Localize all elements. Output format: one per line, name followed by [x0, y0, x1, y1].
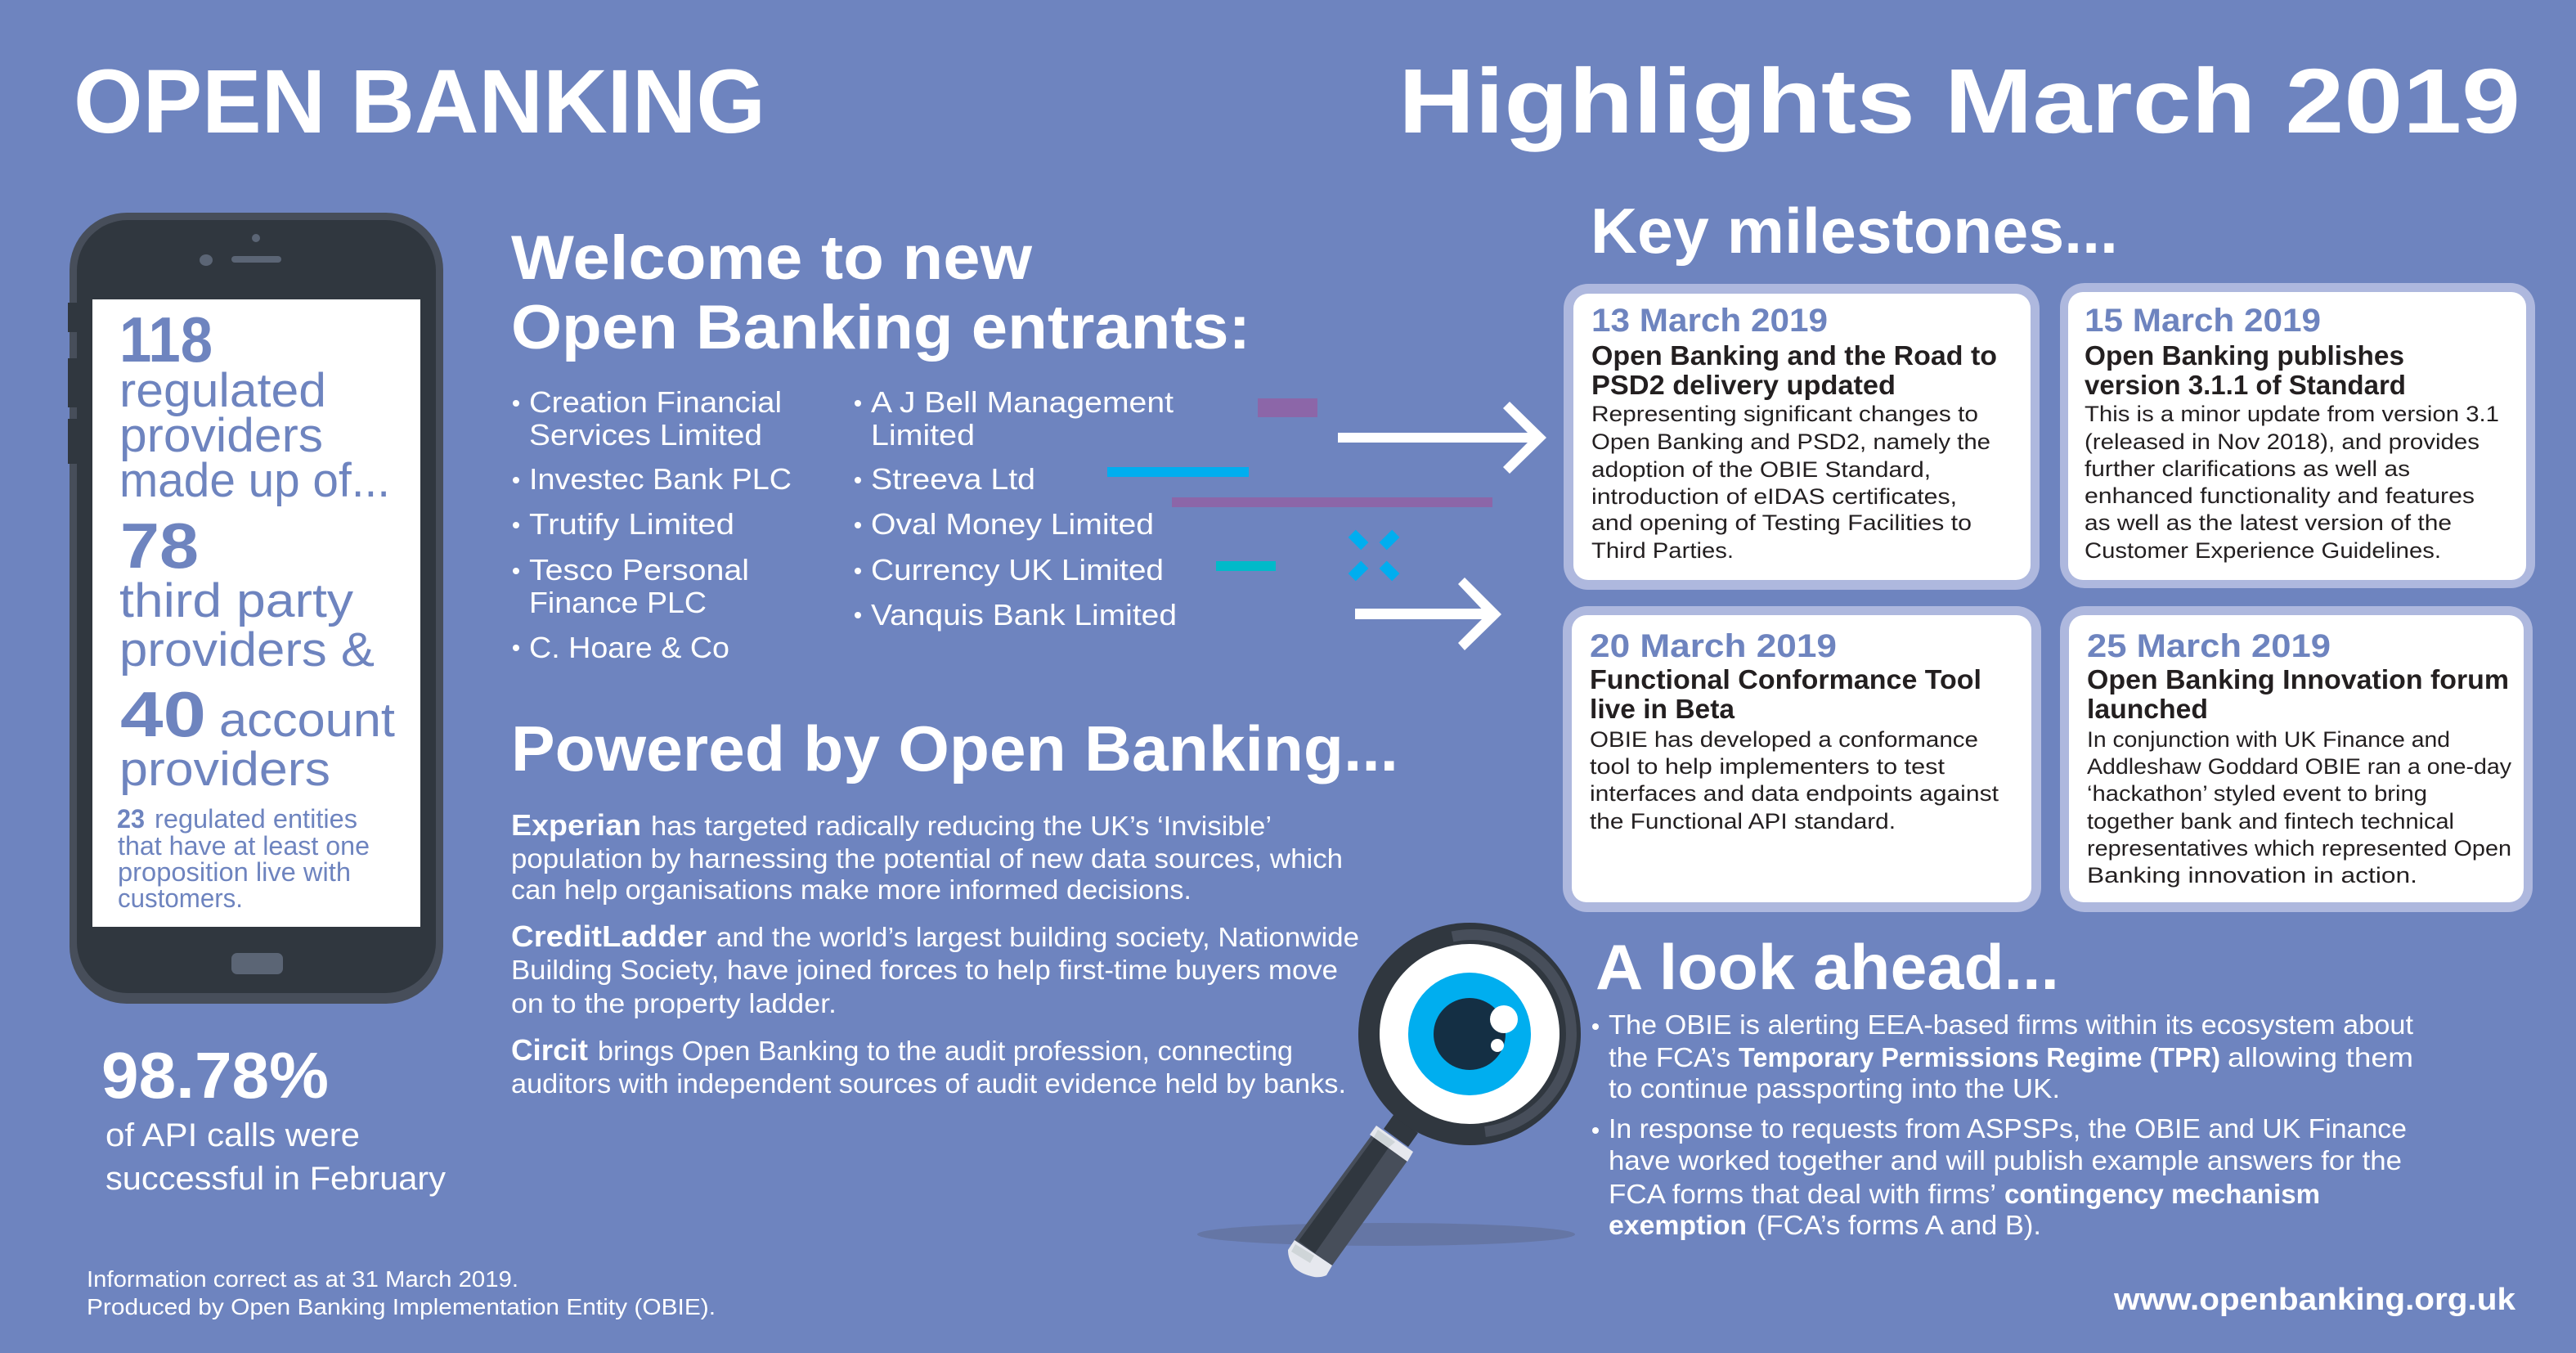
icon: phone side buttons [68, 303, 79, 464]
stat: 78 third party providers [119, 510, 375, 676]
text block: contingency bullet: exemption [1609, 1210, 1747, 1240]
text block: TPR bullet: the FCA’s [1609, 1042, 1730, 1072]
panel: milestone 13 March: and opening of Testing Facilities to [1591, 510, 1972, 535]
panel: milestone 20 March: the Functional API standard. [1590, 809, 1896, 834]
stat: 78 third party providers: 78 [120, 510, 199, 582]
text block: Circit: auditors with independent sources of audit evidence held by banks. [511, 1068, 1346, 1099]
text block: Experian: population by harnessing the potential of new data sources, which [511, 843, 1343, 874]
text block: contingency bullet: contingency mechanism [2004, 1179, 2320, 1209]
magnifier handle [1288, 1126, 1413, 1277]
panel: milestone 15 March: 15 March 2019 [2085, 303, 2321, 339]
panel: milestone 15 March: Customer Experience Guidelines. [2085, 538, 2441, 563]
decorative coloured bars [1107, 398, 1492, 571]
list: entrants column two: Vanquis Bank Limited [871, 598, 1177, 632]
panel: milestone 25 March: In conjunction with UK Finance and [2087, 727, 2450, 752]
list: entrants column one [513, 385, 792, 664]
icon: magnifying glass with eye [1197, 923, 1581, 1277]
panel: phone with statistics [68, 213, 443, 1004]
arrow: lower [1355, 578, 1501, 650]
stat: 118 regulated providers: made up of... [119, 454, 390, 507]
stat: 118 regulated providers [119, 303, 390, 507]
text block: Experian: has targeted radically reducing the UK’s ‘Invisible’ [651, 811, 1272, 841]
stat: 118 regulated providers: regulated [119, 364, 326, 417]
stat: 23 regulated entities: 23 [117, 804, 145, 834]
stat: 40 account providers: providers [119, 743, 330, 796]
text block: TPR bullet [1592, 1009, 2413, 1104]
panel: milestone 25 March: launched [2087, 694, 2208, 724]
text block: TPR bullet: Temporary Permissions Regime (TPR) [1739, 1042, 2220, 1072]
text block: TPR bullet: allowing them [2228, 1042, 2413, 1072]
stat: API call success [101, 1039, 446, 1197]
text block: contingency bullet: In response to requests from ASPSPs, the OBIE and UK Finance [1609, 1113, 2407, 1144]
panel: milestone 15 March: version 3.1.1 of Standard [2085, 370, 2406, 400]
stat: 23 regulated entities: that have at least one [118, 831, 370, 861]
stat: 118 regulated providers: 118 [119, 303, 213, 375]
footer note: Produced by Open Banking Implementation Entity (OBIE). [87, 1294, 716, 1319]
text block: contingency bullet [1592, 1113, 2407, 1240]
panel: milestone 15 March [2060, 283, 2535, 588]
panel: milestone 15 March: This is a minor update from version 3.1 [2085, 402, 2499, 426]
magnifier ring [1358, 923, 1581, 1145]
panel: milestone 15 March: Open Banking publishes [2085, 340, 2404, 371]
panel: milestone 20 March: 20 March 2019 [1590, 628, 1837, 664]
text block: CreditLadder: CreditLadder [511, 919, 707, 953]
panel: milestone 25 March: Banking innovation in action. [2087, 863, 2417, 888]
list: entrants column one: Creation Financial [529, 385, 782, 419]
panel: milestone 15 March: enhanced functionality and features [2085, 483, 2475, 508]
icon: blue cross sparkle [1349, 530, 1399, 581]
text block: contingency bullet: FCA forms that deal with firms’ [1609, 1179, 1996, 1209]
arrow: upper [1338, 402, 1546, 474]
text block: Circit: brings Open Banking to the audit profession, connecting [598, 1036, 1293, 1066]
stat: API call success: successful in February [105, 1161, 446, 1197]
text block: TPR bullet: to continue passporting into the UK. [1609, 1073, 2060, 1104]
panel: milestone 13 March: Open Banking and PSD2, namely the [1591, 429, 1990, 454]
panel: milestone 15 March: (released in Nov 2018), and provides [2085, 429, 2480, 454]
stat: 40 account providers [119, 678, 395, 796]
panel: milestone 20 March: interfaces and data endpoints against [1590, 781, 1999, 806]
magnifier neck [1384, 1115, 1418, 1147]
panel: milestone 25 March [2060, 606, 2533, 912]
heading: Welcome to new entrants: Open Banking entrants: [511, 293, 1250, 362]
list: entrants column two: Oval Money Limited [871, 507, 1154, 541]
icon: phone home button [231, 953, 283, 974]
heading: Welcome to new entrants [511, 223, 1250, 362]
text block: contingency bullet: have worked together and will publish example answers for the [1609, 1145, 2402, 1175]
list: entrants column one: Services Limited [529, 418, 762, 452]
text block: CreditLadder: on to the property ladder. [511, 988, 837, 1018]
text block: Experian: can help organisations make more informed decisions. [511, 874, 1192, 905]
panel: milestone 20 March: Functional Conformance Tool [1590, 664, 1981, 694]
panel: milestone 20 March: live in Beta [1590, 694, 1735, 724]
list: entrants column one: Trutify Limited [529, 507, 734, 541]
panel: milestone 13 March: adoption of the OBIE Standard, [1591, 457, 1931, 482]
stat: 23 regulated entities: customers. [118, 883, 243, 913]
list: entrants column one: Investec Bank PLC [529, 462, 792, 496]
list: entrants column two: Currency UK Limited [871, 553, 1164, 587]
text block: CreditLadder [511, 919, 1359, 1018]
text block: contingency bullet: (FCA’s forms A and B). [1757, 1210, 2041, 1240]
panel: milestone 25 March: ‘hackathon’ styled event to bring [2087, 781, 2427, 806]
magnifier shadow [1197, 1223, 1575, 1246]
stat: 23 regulated entities: proposition live with [118, 857, 351, 887]
panel: milestone 13 March: Open Banking and the Road to [1591, 340, 1997, 371]
icon: phone body [70, 213, 443, 1004]
list: entrants column one: Tesco Personal [529, 553, 749, 587]
panel: milestone 15 March: as well as the latest version of the [2085, 510, 2452, 535]
list: entrants column one: C. Hoare & Co [529, 631, 729, 664]
text block: CreditLadder: and the world’s largest building society, Nationwide [716, 922, 1359, 952]
panel: milestone 25 March: Addleshaw Goddard OBIE ran a one-day [2087, 754, 2512, 779]
heading: Powered by Open Banking: Powered by Open Banking... [511, 712, 1398, 784]
heading: A look ahead: A look ahead... [1595, 931, 2059, 1003]
list: entrants column two [855, 385, 1177, 632]
panel: milestone 13 March: 13 March 2019 [1591, 303, 1828, 339]
list: entrants column two: Streeva Ltd [871, 462, 1035, 496]
text block: TPR bullet: The OBIE is alerting EEA-based firms within its ecosystem about [1609, 1009, 2413, 1040]
stat: 40 account providers: 40 [120, 678, 206, 750]
eye [1408, 973, 1531, 1095]
stat: 40 account providers: account [219, 694, 395, 747]
footer website: www.openbanking.org.uk [2113, 1283, 2516, 1317]
panel: milestone 13 March [1564, 284, 2040, 590]
stat: 23 regulated entities [117, 804, 370, 913]
stat: API call success: of API calls were [105, 1117, 360, 1153]
text block: Experian: Experian [511, 808, 641, 842]
list: entrants column two: Limited [871, 418, 975, 452]
title: Open Banking: OPEN BANKING [74, 52, 765, 152]
stat: 118 regulated providers: providers [119, 409, 323, 462]
stat: API call success: 98.78% [101, 1039, 329, 1112]
footer note: Information correct as at 31 March 2019. [87, 1266, 518, 1292]
list: entrants column one: Finance PLC [529, 586, 707, 619]
stat: 23 regulated entities: regulated entities [155, 804, 357, 834]
text block: Circit: Circit [511, 1033, 588, 1067]
list: entrants column two: A J Bell Management [871, 385, 1174, 419]
heading: Welcome to new entrants: Welcome to new [511, 223, 1033, 293]
panel: milestone 13 March: PSD2 delivery updated [1591, 370, 1896, 400]
panel: milestone 20 March: tool to help implementers to test [1590, 754, 1945, 779]
panel: milestone 25 March: 25 March 2019 [2087, 628, 2331, 664]
icon: phone camera and speaker [200, 234, 281, 266]
footer note [87, 1266, 716, 1319]
panel: milestone 13 March: Representing significant changes to [1591, 402, 1978, 426]
text block: CreditLadder: Building Society, have joined forces to help first-time buyers move [511, 955, 1338, 985]
text block: Experian [511, 808, 1343, 905]
phone screen [92, 299, 420, 927]
heading: Key milestones: Key milestones... [1591, 195, 2118, 267]
panel: milestone 20 March: OBIE has developed a conformance [1590, 727, 1978, 752]
panel: milestone 25 March: representatives which represented Open [2087, 836, 2511, 861]
panel: milestone 20 March [1563, 606, 2041, 912]
stat: 78 third party providers: providers & [119, 623, 375, 676]
panel: milestone 25 March: together bank and fintech technical [2087, 809, 2454, 834]
panel: milestone 13 March: introduction of eIDAS certificates, [1591, 484, 1957, 509]
stat: 78 third party providers: third party [119, 574, 353, 627]
panel: milestone 15 March: further clarifications as well as [2085, 456, 2410, 481]
title: Highlights March 2019: Highlights March 2019 [1398, 50, 2520, 152]
panel: milestone 25 March: Open Banking Innovation forum [2087, 664, 2509, 694]
panel: milestone 13 March: Third Parties. [1591, 538, 1734, 563]
text block: Circit [511, 1033, 1346, 1099]
